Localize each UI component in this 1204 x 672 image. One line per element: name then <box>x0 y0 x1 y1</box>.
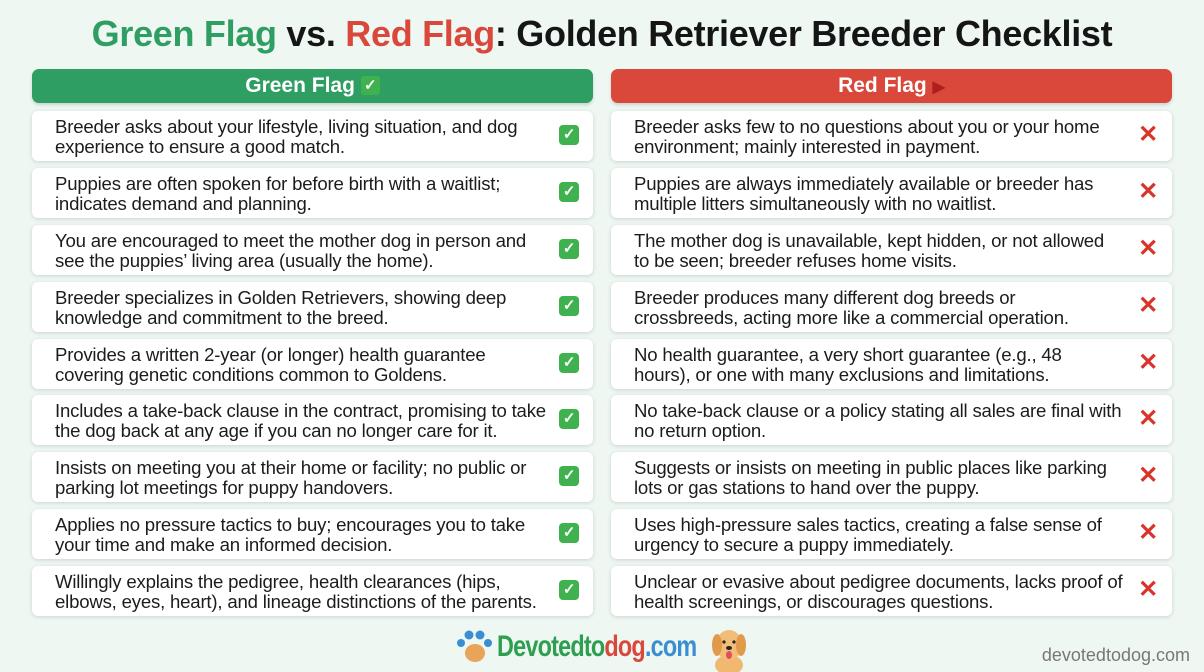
row 1: Breeder asks about your lifestyle, living situation, and dog experience to ensure a good match. <box>55 116 517 157</box>
row 9: Unclear or evasive about pedigree documents, lacks proof of health screenings, or discourages questions. <box>634 571 1122 612</box>
row 1 <box>32 111 593 161</box>
header: red flag: Red Flag ▶ <box>838 74 945 97</box>
row 4: Breeder specializes in Golden Retrievers, showing deep knowledge and commitment to the breed. <box>55 287 506 328</box>
row 6: Includes a take-back clause in the contract, promising to take the dog back at any age if you can no longer care for it. <box>55 400 546 441</box>
header: green flag: ✓ <box>364 77 377 94</box>
row 2: ✓ <box>563 183 575 200</box>
row 5 <box>611 339 1172 389</box>
row 3: You are encouraged to meet the mother dog in person and see the puppies’ living area (usually the home). <box>55 230 526 271</box>
row 3: ✕ <box>1138 235 1158 262</box>
row 8: ✓ <box>563 524 575 541</box>
row 1: ✕ <box>1138 121 1158 148</box>
row 4: ✕ <box>1138 292 1158 319</box>
row 7: Suggests or insists on meeting in public places like parking lots or gas stations to hand over the puppy. <box>634 457 1107 498</box>
row 2: Puppies are often spoken for before birth with a waitlist; indicates demand and planning. <box>55 173 500 214</box>
logo <box>457 630 746 672</box>
row 8: Applies no pressure tactics to buy; encourages you to take your time and make an informed decision. <box>55 514 525 555</box>
row 5: ✓ <box>563 354 575 371</box>
row 5 <box>32 339 593 389</box>
row 8: Uses high-pressure sales tactics, creating a false sense of urgency to secure a puppy immediately. <box>634 514 1102 555</box>
row 1 <box>611 111 1172 161</box>
row 4: ✓ <box>563 297 575 314</box>
row 5: Provides a written 2-year (or longer) health guarantee covering genetic conditions common to Goldens. <box>55 344 486 385</box>
icon: paw <box>457 630 492 662</box>
row 8 <box>32 509 593 559</box>
row 2: ✕ <box>1138 178 1158 205</box>
panel: red flags <box>610 69 1174 618</box>
row 3: to be seen; breeder refuses home visits. <box>634 250 957 271</box>
row 7: ✓ <box>563 467 575 484</box>
row 9: Willingly explains the pedigree, health clearances (hips, elbows, eyes, heart), and lineage distinctions of the parents. <box>55 571 537 612</box>
row 4: Breeder produces many different dog breeds or <box>634 287 1015 308</box>
row 9: ✓ <box>563 581 575 598</box>
row 5: hours), or one with many exclusions and limitations. <box>634 364 1049 385</box>
row 7 <box>611 452 1172 502</box>
row 4: crossbreeds, acting more like a commercial operation. <box>634 307 1069 328</box>
panel: green flags <box>30 69 594 618</box>
icon: golden retriever <box>712 630 746 672</box>
row 7: ✕ <box>1138 462 1158 489</box>
row 7: Insists on meeting you at their home or facility; no public or parking lot meetings for puppy handovers. <box>55 457 526 498</box>
row 1: Breeder asks few to no questions about you or your home environment; mainly interested in payment. <box>634 116 1099 157</box>
row 3 <box>32 225 593 275</box>
row 1: ✓ <box>563 126 575 143</box>
footer url: devotedtodog.com <box>1042 645 1190 665</box>
header: red flag <box>611 69 1172 103</box>
row 5: No health guarantee, a very short guarantee (e.g., 48 <box>634 344 1062 365</box>
row 3 <box>611 225 1172 275</box>
row 7 <box>32 452 593 502</box>
row 3: The mother dog is unavailable, kept hidden, or not allowed <box>634 230 1104 251</box>
header: green flag: Green Flag <box>245 74 355 97</box>
row 2 <box>32 168 593 218</box>
row 3: ✓ <box>563 240 575 257</box>
row 6: No take-back clause or a policy stating all sales are final with no return option. <box>634 400 1121 441</box>
row 6: ✕ <box>1138 405 1158 432</box>
row 2 <box>611 168 1172 218</box>
row 4 <box>611 282 1172 332</box>
row 8: ✕ <box>1138 519 1158 546</box>
title: Green Flag vs. Red Flag: Golden Retriever Breeder Checklist <box>92 13 1112 54</box>
row 9: ✕ <box>1138 576 1158 603</box>
logo text: Devotedtodog.com <box>497 630 696 663</box>
row 4 <box>32 282 593 332</box>
row 2: Puppies are always immediately available or breeder has multiple litters simultaneously with no waitlist. <box>634 173 1093 214</box>
row 6: ✓ <box>563 410 575 427</box>
row 5: ✕ <box>1138 349 1158 376</box>
row 8 <box>611 509 1172 559</box>
header: green flag <box>32 69 593 103</box>
